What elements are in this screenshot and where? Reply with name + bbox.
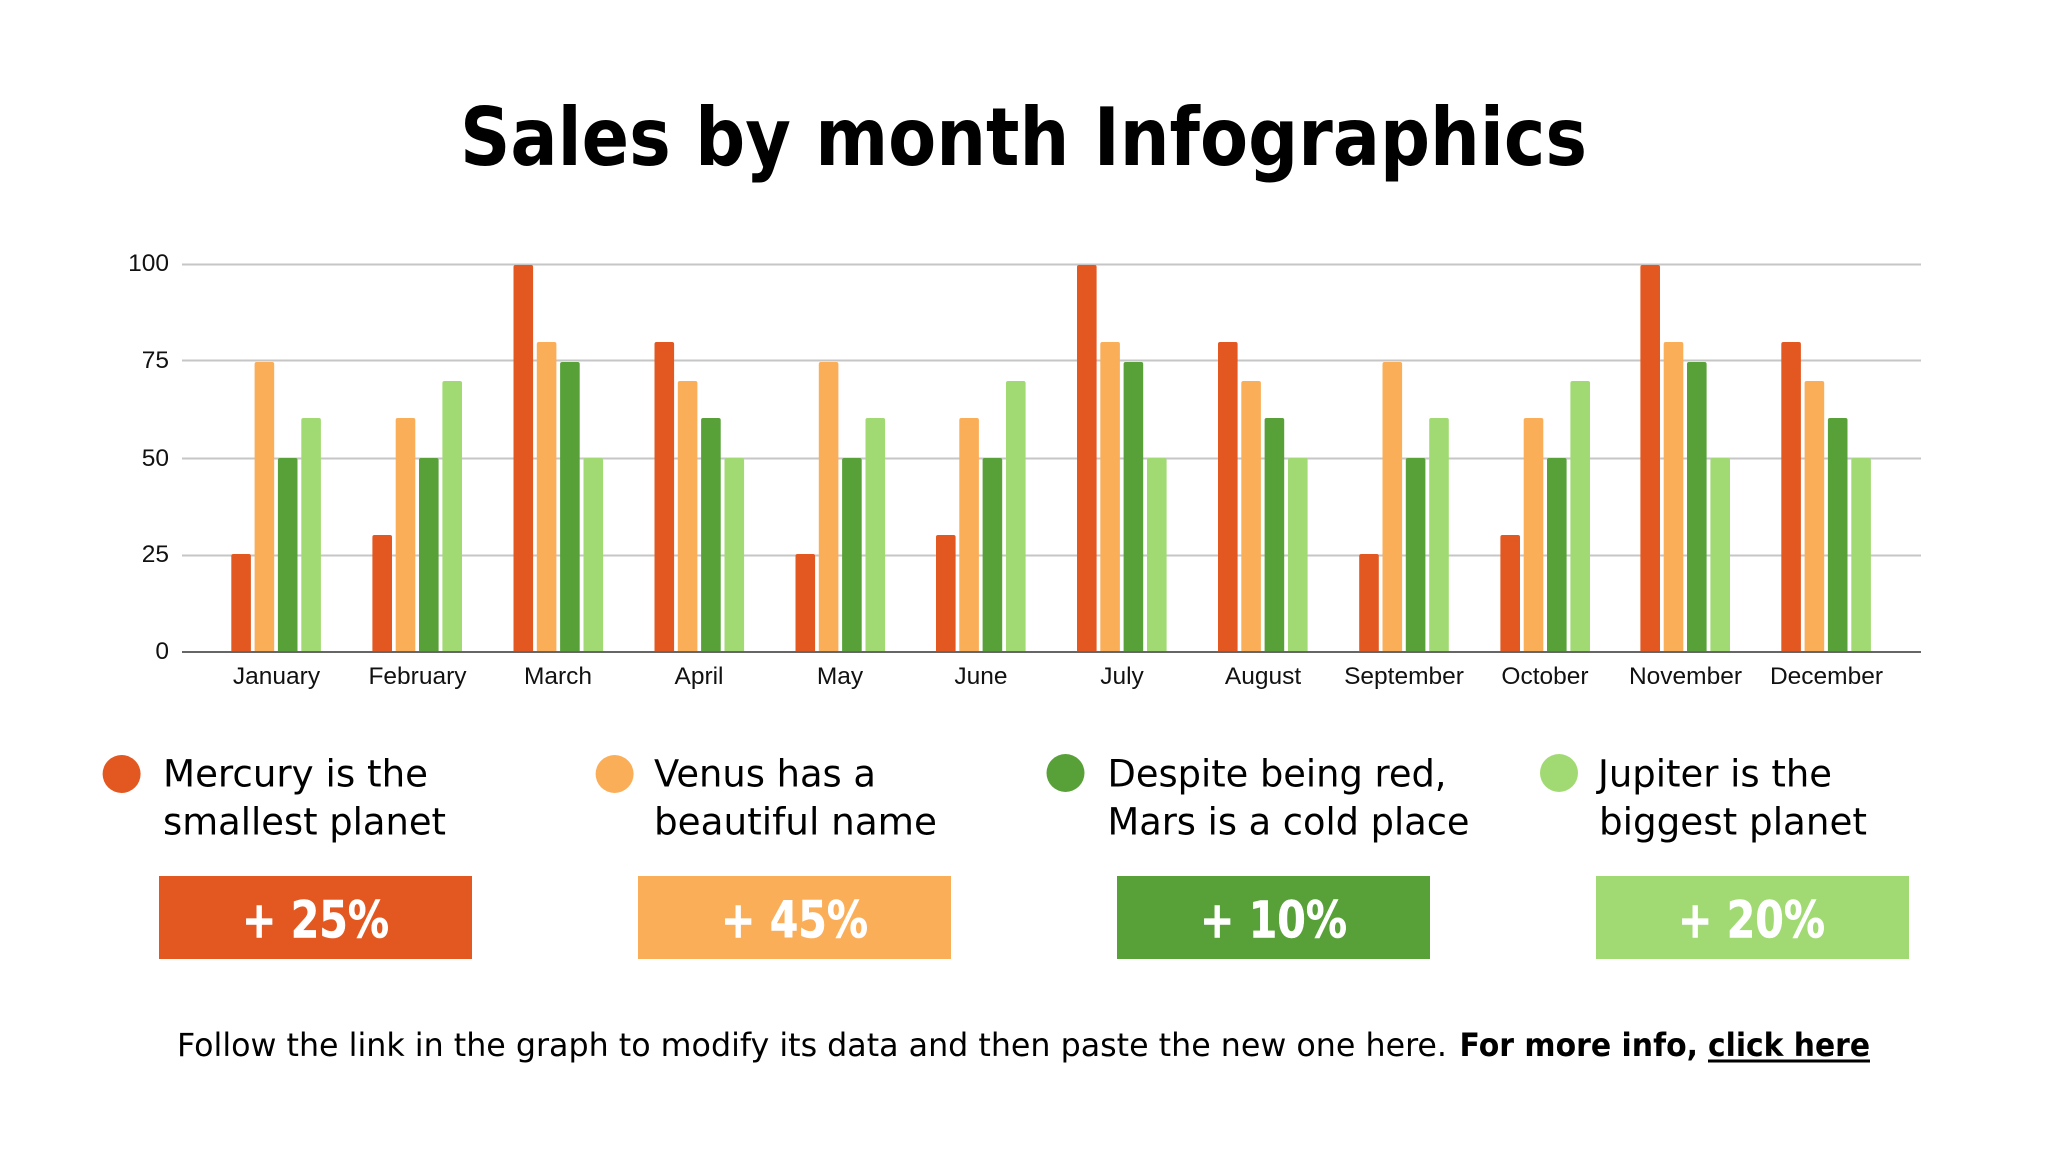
icon: Venus dot: [596, 755, 634, 793]
bars: May: [796, 362, 885, 654]
bars: September: [1359, 362, 1449, 654]
stat: Venus +45%: [638, 876, 951, 959]
stat: Mars +10%: [1117, 876, 1430, 959]
x axis month labels: June: [954, 663, 1008, 690]
footer note: For more info,: [1460, 1026, 1698, 1064]
x axis line: [182, 651, 1921, 653]
Mars text: Despite being red,: [1108, 752, 1446, 796]
bars: October: [1500, 381, 1590, 654]
legend: Venus: [596, 752, 951, 959]
legend: Mars: [1046, 752, 1470, 959]
stat: Venus +45%: + 45%: [721, 892, 868, 950]
x axis month labels: July: [1100, 663, 1145, 690]
Jupiter text: Jupiter is the: [1596, 752, 1832, 796]
bar chart: sales by month: [128, 250, 1921, 690]
bars: August: [1218, 342, 1308, 654]
x axis month labels: February: [368, 663, 467, 690]
Jupiter text: biggest planet: [1599, 800, 1867, 844]
stat: Mercury +25%: [159, 876, 472, 959]
stat: Mars +10%: + 10%: [1200, 892, 1347, 950]
Mercury text: Mercury is the: [163, 752, 428, 796]
y axis labels: [128, 250, 169, 665]
x axis month labels: August: [1225, 663, 1301, 690]
Venus text: beautiful name: [654, 800, 937, 844]
Venus text: Venus has a: [654, 752, 876, 796]
icon: Mars dot: [1046, 754, 1084, 792]
Mercury text: [163, 752, 446, 844]
bars: July: [1077, 265, 1167, 654]
stat: Jupiter +20%: [1596, 876, 1909, 959]
stat: Jupiter +20%: + 20%: [1678, 892, 1825, 950]
Jupiter text: [1596, 752, 1867, 844]
bars: June: [936, 381, 1026, 654]
Mercury text: smallest planet: [163, 800, 446, 844]
footer note: Follow the link in the graph to modify its data and then paste the new one here.: [177, 1026, 1447, 1064]
bars: December: [1781, 342, 1871, 654]
Mars text: [1108, 752, 1470, 844]
x axis month labels: December: [1770, 663, 1883, 690]
x axis month labels: November: [1629, 663, 1742, 690]
legend: Mercury: [103, 752, 472, 959]
Mars text: Mars is a cold place: [1108, 800, 1470, 844]
icon: Jupiter dot: [1540, 754, 1578, 792]
x axis month labels: October: [1501, 663, 1589, 690]
icon: Mercury dot: [103, 755, 141, 793]
y axis labels: 25: [142, 541, 169, 568]
bars: January: [231, 362, 321, 654]
bars: February: [372, 381, 462, 654]
title: Sales by month Infographics: [460, 91, 1587, 184]
y axis labels: 0: [155, 638, 169, 665]
stat: Mercury +25%: + 25%: [242, 892, 389, 950]
x axis month labels: April: [674, 663, 724, 690]
y axis labels: 75: [142, 347, 169, 374]
legend: Jupiter: [1540, 752, 1909, 959]
bars: November: [1640, 265, 1730, 654]
bars: March: [514, 265, 603, 654]
y axis labels: 50: [142, 445, 169, 472]
x axis month labels: [233, 663, 1883, 690]
Venus text: [654, 752, 937, 844]
y axis labels: 100: [128, 250, 169, 277]
x axis month labels: September: [1344, 663, 1464, 690]
footer note: click here: [1708, 1026, 1870, 1064]
bars: April: [654, 342, 744, 654]
x axis month labels: May: [817, 663, 864, 690]
x axis month labels: January: [233, 663, 321, 690]
x axis month labels: March: [524, 663, 592, 690]
